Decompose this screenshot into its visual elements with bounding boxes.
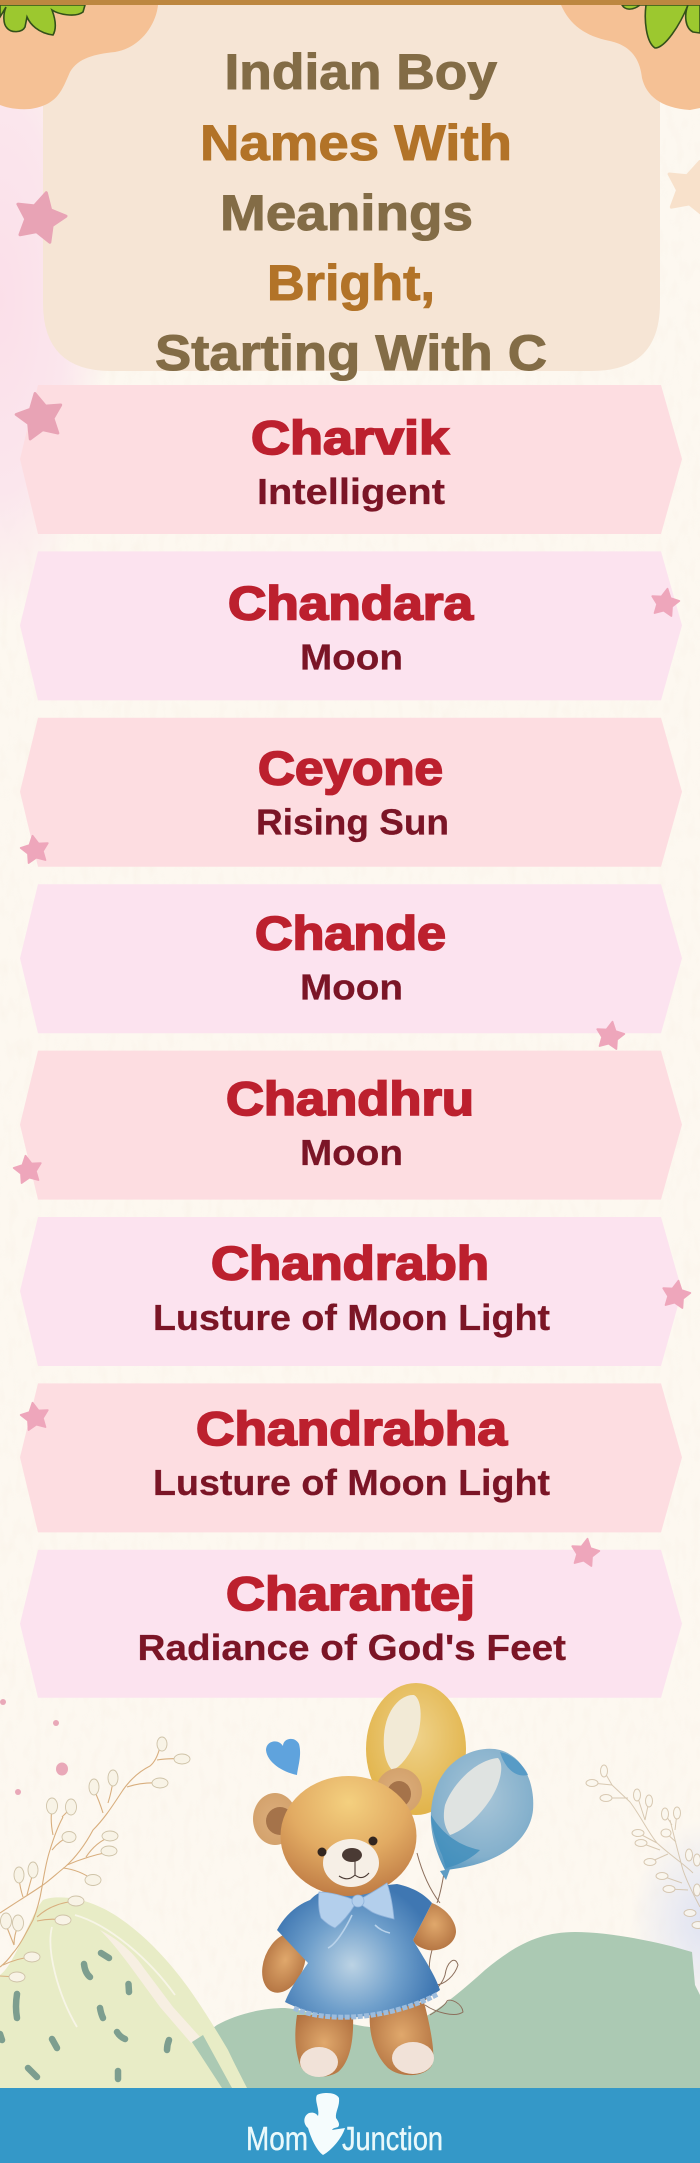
name banner 7: Chandrabha <box>196 1402 508 1455</box>
name banner 5: Chandhru <box>226 1072 474 1125</box>
title <box>155 44 547 381</box>
name banner 3: Ceyone <box>258 742 443 795</box>
name banner 4: Moon <box>300 967 403 1008</box>
icon: teddy bear with balloons <box>253 1683 533 2077</box>
name banner 3: Rising Sun <box>256 802 449 843</box>
bow tie <box>319 1883 394 1928</box>
name banner 6 <box>20 1217 682 1366</box>
title: Bright, <box>267 255 435 311</box>
top right corner blob <box>561 5 700 110</box>
left arm <box>254 1927 314 1999</box>
title panel <box>43 5 660 371</box>
right branches <box>586 1765 700 1928</box>
name banner 6: Lusture of Moon Light <box>153 1297 550 1338</box>
top left corner blob <box>0 5 158 109</box>
title: Names With <box>200 115 512 171</box>
green hill <box>190 1932 700 2088</box>
name banner 7 <box>20 1383 682 1532</box>
logo wordmark: Junction <box>342 2120 443 2157</box>
right ear <box>376 1768 422 1814</box>
name banner 8: Radiance of God's Feet <box>138 1627 566 1668</box>
name banner 2: Moon <box>300 636 403 678</box>
left branches <box>0 1737 190 1982</box>
stars <box>11 155 700 1567</box>
muzzle <box>323 1839 379 1887</box>
name banner 5: Moon <box>300 1132 403 1173</box>
name banner 8: Charantej <box>226 1567 475 1620</box>
name banner 2: Chandara <box>228 576 474 630</box>
foot pads <box>300 2042 434 2077</box>
name banner 1: Charvik <box>251 411 450 464</box>
name banner 4 <box>20 884 682 1033</box>
light hill <box>0 1897 247 2088</box>
yellow balloon <box>366 1683 466 1815</box>
title: Meanings <box>220 185 473 241</box>
name banner 3 <box>20 718 682 867</box>
head <box>280 1776 416 1896</box>
name banner 1 <box>20 385 682 534</box>
footer bar <box>0 2088 700 2163</box>
icon: left leaves <box>0 5 85 35</box>
logo wordmark <box>246 2120 443 2157</box>
dress <box>277 1884 440 2018</box>
name banner 5 <box>20 1051 682 1200</box>
balloon strings <box>417 1853 463 2015</box>
name banner 7: Lusture of Moon Light <box>153 1462 550 1503</box>
hill highlight <box>100 1930 200 2043</box>
hill dashes <box>0 1953 169 2079</box>
name banner 8 <box>20 1550 682 1698</box>
logo wordmark: Mom <box>246 2120 308 2157</box>
name banner 2 <box>20 551 682 700</box>
hill brush lines <box>50 1915 175 2027</box>
name banner 1: Intelligent <box>257 471 445 512</box>
name banner 6: Chandrabh <box>211 1236 489 1290</box>
right arm <box>413 1903 456 1950</box>
left ear <box>253 1793 297 1845</box>
top strip <box>0 0 700 5</box>
name banner 4: Chande <box>255 907 446 960</box>
blue balloon <box>431 1749 533 1880</box>
logo silhouette <box>304 2093 345 2155</box>
icon: blue heart <box>266 1739 300 1775</box>
title: Indian Boy <box>224 44 497 100</box>
eyes <box>318 1836 378 1856</box>
left leg <box>295 2015 353 2077</box>
right leg <box>370 2002 433 2075</box>
paint dots <box>0 1699 68 1795</box>
icon: right leaves <box>622 5 700 48</box>
green wedge on hill <box>192 2035 232 2088</box>
title: Starting With C <box>155 325 547 381</box>
